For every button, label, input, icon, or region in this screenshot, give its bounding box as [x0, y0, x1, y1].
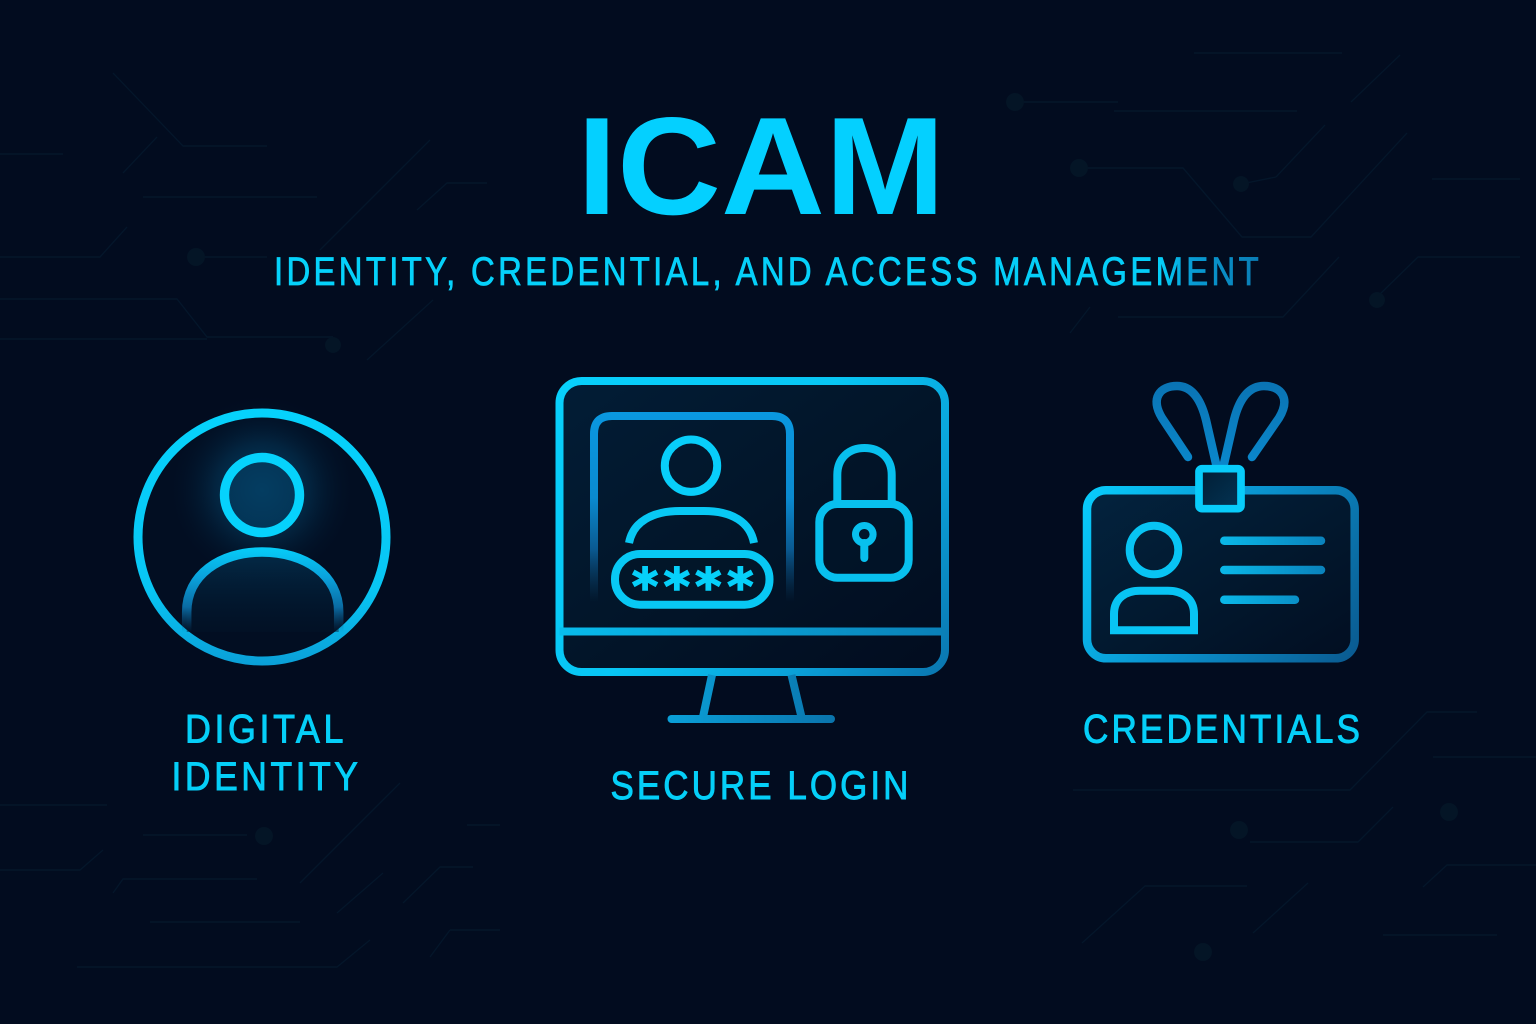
label: digital identity — [172, 708, 362, 799]
label: credentials: CREDENTIALS — [1083, 708, 1363, 752]
icon: credentials id badge — [1087, 386, 1355, 658]
label: secure login: SECURE LOGIN — [610, 764, 912, 808]
icon: secure login monitor — [560, 381, 945, 719]
person shoulders — [187, 552, 339, 632]
login panel — [594, 416, 790, 616]
label: digital identity: DIGITAL — [185, 708, 347, 752]
badge text lines — [1224, 541, 1321, 600]
clip — [1199, 469, 1241, 509]
label: digital identity: IDENTITY — [172, 755, 362, 799]
password asterisks: **** — [632, 558, 753, 616]
subtitle: IDENTITY, CREDENTIAL, AND ACCESS MANAGEMENT — [274, 250, 1262, 294]
title: ICAM — [577, 89, 945, 244]
person head — [224, 458, 300, 532]
badge portrait — [1114, 526, 1194, 630]
icon: padlock — [819, 448, 909, 578]
lanyard — [1157, 386, 1284, 468]
icon: digital identity — [138, 395, 386, 661]
